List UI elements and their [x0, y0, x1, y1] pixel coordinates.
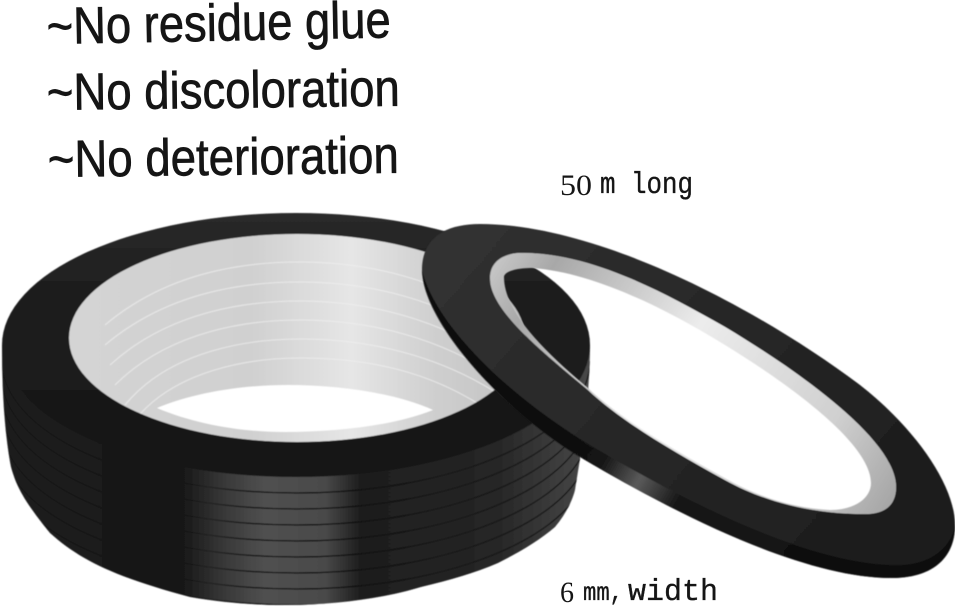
roll inner core — [69, 234, 525, 442]
label: width: mm, — [583, 578, 623, 608]
icon: thin tape ring — [422, 224, 955, 578]
ring inner band — [490, 253, 896, 514]
side winding lines — [2, 361, 590, 605]
label: width: width — [628, 575, 718, 610]
text: no deterioration: ~No deterioration — [47, 127, 399, 189]
label: length — [560, 168, 693, 203]
roll top face — [2, 213, 590, 477]
ring edge face — [422, 270, 955, 578]
label: length: m long — [600, 168, 693, 203]
label: length: 50 — [560, 169, 592, 202]
icon: large tape roll — [2, 213, 590, 605]
core winding lines — [105, 262, 500, 420]
roll outer side — [2, 345, 590, 605]
feature list heading text — [46, 0, 400, 189]
text: no discoloration: ~No discoloration — [46, 60, 400, 122]
label: width — [560, 575, 718, 610]
ring outer shape — [422, 224, 955, 578]
label: width: 6 — [560, 576, 574, 609]
hole through the core — [157, 385, 433, 432]
